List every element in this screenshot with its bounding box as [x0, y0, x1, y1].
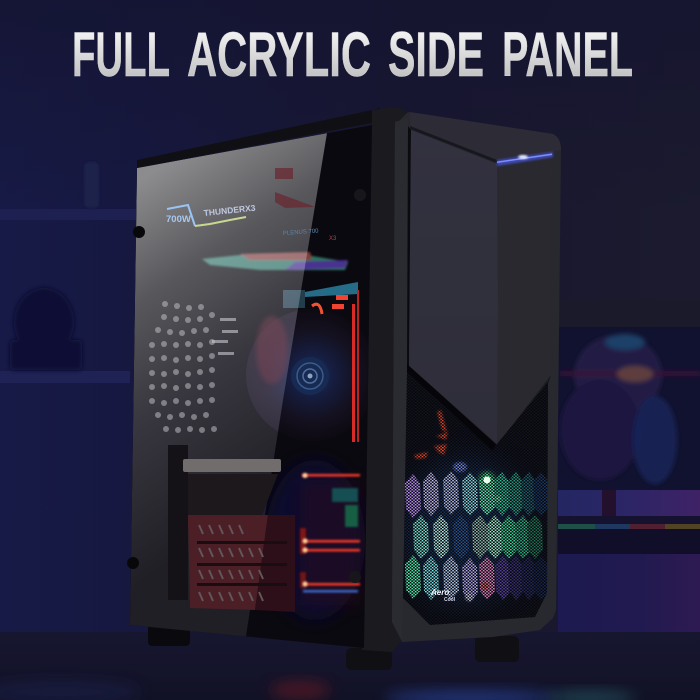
red LED bottom	[482, 582, 488, 590]
Aerocool logo: Cool	[444, 597, 456, 603]
top-right glass screw	[354, 189, 366, 201]
blue LED bottom	[465, 593, 473, 601]
bottom-right glass screw	[349, 571, 361, 583]
front mesh with RGB fan	[400, 370, 550, 628]
red reflection cluster	[414, 410, 448, 459]
top-left glass screw	[133, 226, 145, 238]
front panel body	[392, 112, 561, 642]
heatsink fin reflections	[212, 318, 238, 355]
heatsink top with LEDs	[283, 282, 358, 314]
desk surface	[0, 632, 700, 700]
title	[72, 20, 633, 90]
CPU cooler fan	[246, 311, 368, 432]
red slot panel	[188, 515, 268, 610]
hexagon row 2	[413, 515, 543, 559]
figurine on upper shelf	[84, 162, 99, 208]
mesh overlay	[400, 370, 550, 628]
monitor artwork	[560, 334, 700, 484]
fan glow	[405, 460, 525, 600]
reflected PSU label: X3	[329, 236, 337, 242]
wall above monitor	[558, 300, 700, 327]
bright LED hot spots	[302, 473, 308, 586]
monitor on the right	[558, 327, 700, 634]
upper left facet	[409, 130, 499, 445]
title: SIDE	[388, 20, 484, 90]
light bracket	[183, 459, 281, 472]
motherboard tray dark column	[168, 445, 188, 600]
reflected red marks	[275, 168, 315, 208]
title: FULL	[72, 20, 170, 90]
hexagon row 1	[405, 471, 549, 518]
helmet silhouette on shelf	[10, 288, 82, 370]
red horizontal LED bars	[300, 474, 360, 592]
shelves on the left wall	[0, 209, 136, 383]
cable cluster	[332, 488, 358, 527]
title: ACRYLIC	[187, 20, 371, 90]
slot holes	[199, 525, 263, 601]
red vertical LED strips	[352, 290, 359, 442]
reflected PSU logo: THUNDERX3	[203, 203, 256, 218]
interior red ambience	[300, 480, 360, 605]
green LED core	[484, 476, 490, 484]
reflected PSU logo	[166, 203, 256, 226]
PC case	[127, 107, 561, 652]
slot shadows	[197, 541, 287, 586]
V groove shadow	[407, 364, 497, 452]
interior blue ambience	[265, 460, 365, 620]
upper right facet	[497, 156, 552, 445]
perforation dots	[149, 301, 217, 433]
pillar dark seam	[407, 126, 411, 368]
RGB keyboard line	[558, 524, 700, 529]
bottom-left glass screw	[127, 557, 139, 569]
pillar light strip	[392, 118, 408, 640]
Aerocool logo: Aero	[430, 588, 449, 597]
acrylic side panel	[127, 125, 378, 648]
top band of front panel	[410, 112, 561, 160]
reflected PSU label	[283, 228, 336, 240]
blue LEDs above fan	[453, 462, 467, 472]
reflected PSU logo: 700W	[166, 214, 191, 225]
hexagon row 3	[405, 555, 549, 602]
blue LED strip	[497, 152, 553, 166]
red slot panel in shadow	[255, 515, 295, 612]
green LED	[479, 472, 495, 488]
side top rail	[137, 108, 380, 168]
case feet	[148, 624, 519, 670]
front pillar	[362, 107, 408, 652]
Aerocool logo	[430, 588, 456, 603]
second V edge	[492, 375, 551, 452]
second green LED	[494, 496, 502, 502]
top groove	[410, 126, 497, 163]
reflected PSU label: PLENUS 700	[283, 228, 319, 237]
RAM LED reflection	[202, 252, 348, 270]
acrylic reflection	[130, 133, 327, 642]
dark mid-case shadow	[188, 474, 278, 515]
